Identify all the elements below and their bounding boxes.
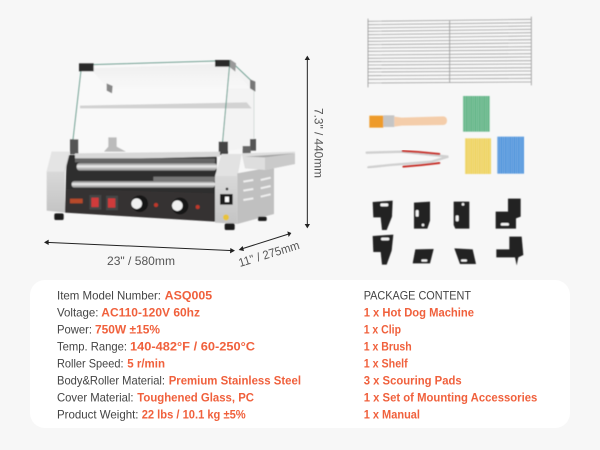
dimension label: width: 23" / 580mm bbox=[107, 254, 175, 268]
control panel details bbox=[65, 189, 215, 222]
text block: specifications: AC110-120V 60hz bbox=[101, 306, 200, 320]
accessory: wire shelf rack bbox=[368, 17, 531, 87]
accessory: clip tongs bbox=[367, 151, 448, 167]
panel: specification card bbox=[30, 280, 570, 428]
dimension label: height: 7.3" / 440mm bbox=[312, 108, 326, 178]
text block: package content: 1 x Brush bbox=[364, 340, 412, 354]
text block: package content: 1 x Clip bbox=[364, 322, 401, 336]
text block: specifications: Power: bbox=[57, 322, 92, 336]
text block: specifications bbox=[57, 288, 301, 422]
text block: package content bbox=[364, 288, 538, 422]
text block: package content: 1 x Shelf bbox=[364, 356, 409, 370]
text block: specifications: 22 lbs / 10.1 kg ±5% bbox=[142, 408, 246, 422]
text block: specifications: 140-482°F / 60-250°C bbox=[130, 340, 255, 354]
text block: package content: PACKAGE CONTENT bbox=[364, 288, 472, 302]
text block: specifications: 5 r/min bbox=[127, 356, 165, 370]
text block: specifications: Voltage: bbox=[57, 306, 98, 320]
product: hot dog roller machine bbox=[47, 59, 295, 230]
dimension label: depth: 11" / 275mm bbox=[237, 238, 301, 270]
text block: specifications: 750W ±15% bbox=[95, 322, 160, 336]
text block: specifications: Roller Speed: bbox=[57, 356, 124, 370]
text block: specifications: Cover Material: bbox=[57, 390, 134, 404]
text block: specifications: ASQ005 bbox=[165, 288, 213, 302]
machine body bbox=[47, 152, 295, 230]
text block: specifications: Toughened Glass, PC bbox=[137, 390, 254, 404]
text block: package content: 1 x Set of Mounting Accessories bbox=[364, 390, 538, 404]
accessory: scouring pads bbox=[463, 96, 524, 174]
text block: package content: 1 x Manual bbox=[364, 408, 420, 422]
glass cover bbox=[70, 59, 256, 155]
text block: specifications: Premium Stainless Steel bbox=[169, 374, 301, 388]
text block: package content: 1 x Hot Dog Machine bbox=[364, 306, 474, 320]
accessory: mounting brackets bbox=[373, 199, 523, 265]
text block: specifications: Body&Roller Material: bbox=[57, 374, 165, 388]
text block: specifications: Item Model Number: bbox=[57, 288, 161, 302]
text block: package content: 3 x Scouring Pads bbox=[364, 374, 462, 388]
accessory: brush bbox=[369, 115, 447, 128]
text block: specifications: Product Weight: bbox=[57, 408, 138, 422]
dimension arrows bbox=[44, 56, 310, 253]
text block: specifications: Temp. Range: bbox=[57, 340, 127, 354]
